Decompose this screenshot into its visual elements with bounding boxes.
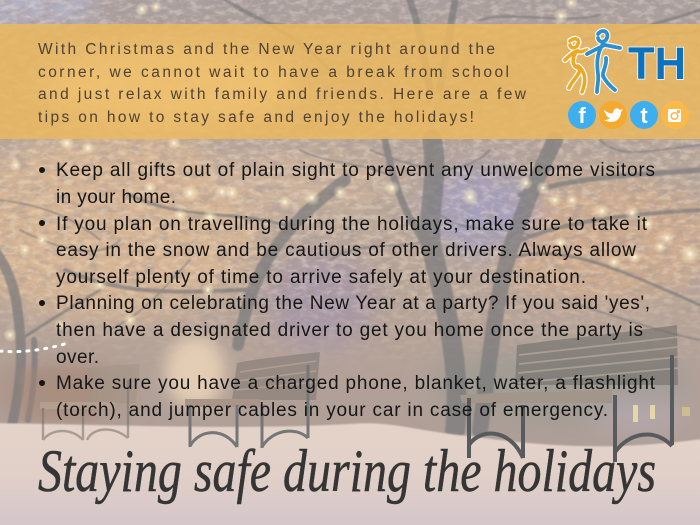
- tips list: [39, 160, 656, 421]
- intro text: tips on how to stay safe and enjoy the holidays!: [38, 109, 474, 126]
- tip 3: party: Planning on celebrating the New Year at a party? If you said 'yes',: [56, 293, 650, 314]
- logo: TH: [565, 31, 686, 92]
- intro text: With Christmas and the New Year right around the: [38, 41, 495, 58]
- centre bench: [185, 352, 320, 448]
- tip 3: party: [39, 293, 650, 368]
- tip 3: party: then have a designated driver to get you home once the party is: [56, 320, 643, 341]
- social icons: [568, 101, 689, 129]
- tip 1: gifts: Keep all gifts out of plain sight to prevent any unwelcome visitors: [56, 160, 655, 181]
- tip 4: emergency kit: Make sure you have a charged phone, blanket, water, a flashlight: [56, 373, 656, 394]
- logo letters: TH: [628, 38, 686, 89]
- tip 4: emergency kit: (torch), and jumper cables in your car in case of emergency.: [56, 400, 608, 421]
- intro text: [38, 41, 527, 126]
- icon: facebook: f: [578, 103, 586, 128]
- tip 2: travelling: [39, 214, 648, 288]
- tip 1: gifts: [39, 160, 655, 208]
- tip 3: party: over.: [56, 347, 99, 368]
- tip 2: travelling: easy in the snow and be cautious of other drivers. Always allow: [56, 240, 636, 261]
- string lights and sparkles: [0, 0, 700, 352]
- intro text: corner, we cannot wait to have a break from school: [38, 64, 509, 81]
- icon: instagram: [661, 101, 689, 129]
- intro text: and just relax with family and friends. Here are a few: [38, 86, 527, 103]
- park benches: [40, 325, 678, 462]
- tip 2: travelling: If you plan on travelling during the holidays, make sure to take it: [56, 214, 648, 235]
- tip 4: emergency kit: [39, 373, 656, 421]
- building glow: [20, 368, 98, 420]
- far left bench: [40, 364, 140, 440]
- icon: blue figure: [587, 31, 620, 92]
- lit windows: [633, 405, 690, 422]
- tip 2: travelling: yourself plenty of time to arrive safely at your destination.: [56, 267, 586, 288]
- panel: intro banner: [0, 24, 700, 139]
- icon: tumblr: t: [640, 103, 648, 128]
- distant glowing tree: [165, 336, 225, 408]
- snow ground: [0, 423, 700, 525]
- right bench: [460, 325, 678, 462]
- icon: twitter: [599, 101, 627, 129]
- tip 1: gifts: in your home.: [56, 187, 176, 208]
- icon: orange figure: [565, 39, 587, 92]
